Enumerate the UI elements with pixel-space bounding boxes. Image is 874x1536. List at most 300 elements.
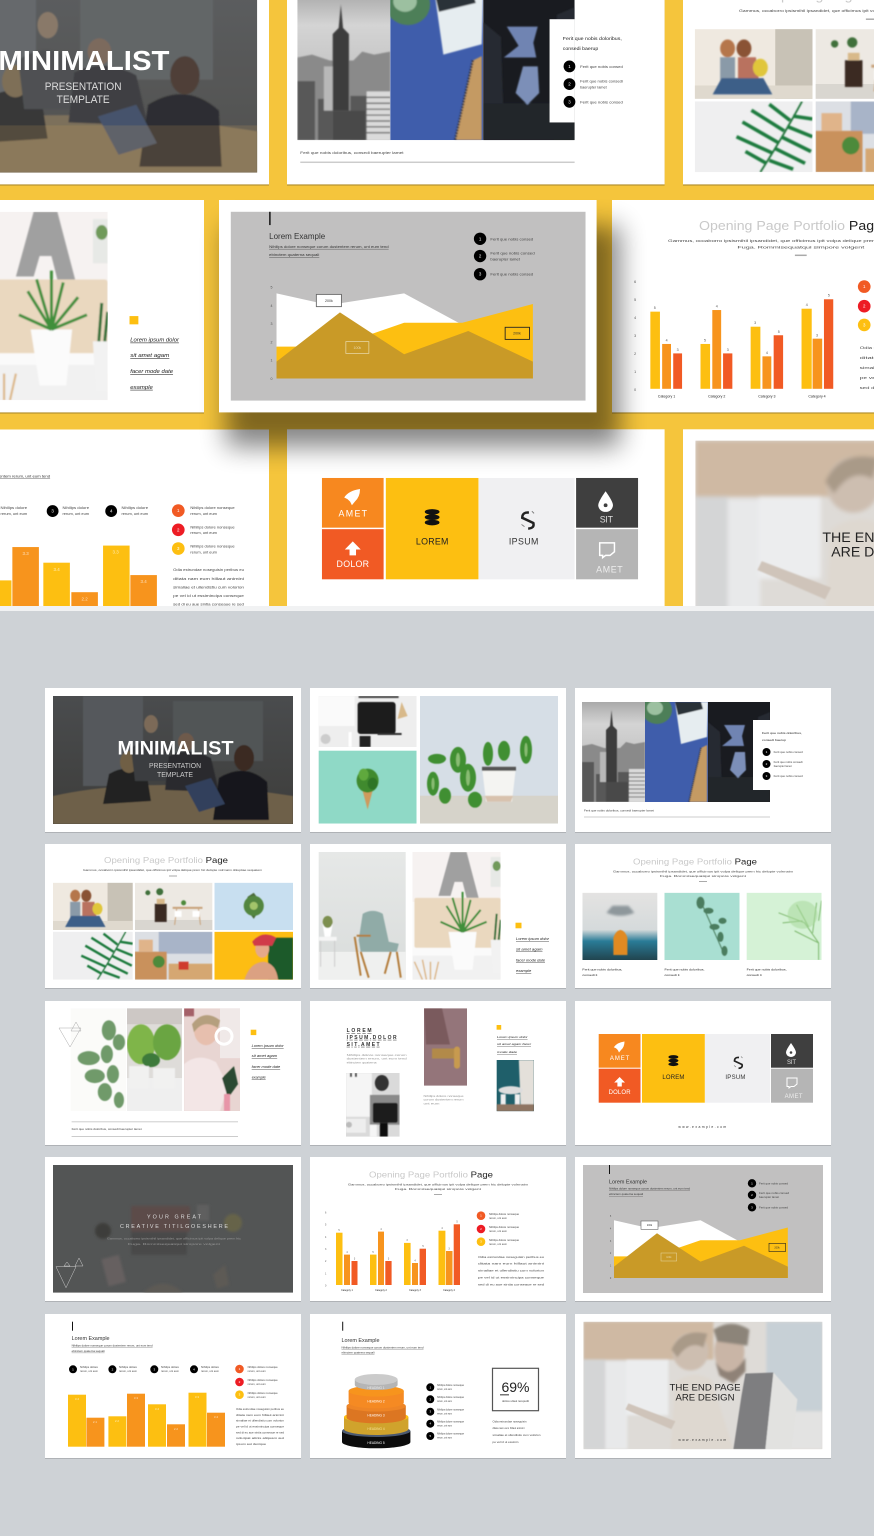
slide: portfolio bar chart (top): 4: [766, 351, 768, 355]
slide 11: portfolio bar chart: 4: [380, 1228, 382, 1231]
slide: six column bar chart (top): 3.4: [54, 567, 60, 572]
slide 5: chair and letter A photos: Lorem ipsum dolor: [516, 937, 550, 941]
slide: city photo strip (top): Ferit que nobis doloribus,: [563, 36, 622, 41]
slide 11: portfolio bar chart: Category 4: [443, 1289, 456, 1292]
slide 9: colour tiles: AMET: [785, 1094, 803, 1100]
slide 11: portfolio bar chart: Category 1: [341, 1289, 354, 1292]
slide 12: area chart: 200k: [774, 1246, 780, 1249]
slide 15: the end page: ARE DESIGN: [676, 1392, 735, 1403]
slide 12: area chart: 1: [610, 1265, 612, 1268]
slide 13: six column bar chart: ebinctem quaterna sequali: [72, 1350, 105, 1353]
slide 13: six column bar chart: 1: [72, 1367, 74, 1371]
slide: featured area chart (top): Lorem Example: [269, 232, 326, 241]
slide 6: portfolio three photos: consedi it: [664, 973, 680, 977]
slide 14: stacked cylinder diagram: [310, 1314, 566, 1459]
slide: featured area chart (top): 200k: [513, 332, 521, 336]
slide 13: six column bar chart: Odia estrundae noseguisin peribus eu: [236, 1407, 285, 1411]
slide 13: six column bar chart: 4: [193, 1367, 195, 1371]
slide: letter A photo (top): example: [130, 385, 153, 391]
slide 9: colour tiles: www.example.com: [678, 1125, 728, 1129]
slide: photo grid (top): [683, 0, 874, 186]
slide 6: portfolio three photos: [575, 844, 831, 989]
slide: six column bar chart (top): 3: [177, 546, 180, 551]
slide: six column bar chart (top): Odia estrundae noseguisin peribus eu: [173, 568, 244, 572]
slide: featured area chart (top): 2: [271, 340, 273, 344]
slide: featured area chart (top): 1: [271, 359, 273, 363]
slide 11: portfolio bar chart: simaliae et ullendistiu cum volorion: [478, 1269, 545, 1273]
slide 13: six column bar chart: rerum, unt eum: [80, 1369, 98, 1373]
slide: portfolio bar chart (top): 2: [863, 304, 866, 309]
slide: minimalist cover (top): MINIMALIST: [0, 45, 169, 76]
slide: portfolio bar chart (top): 4: [666, 339, 668, 343]
slide 8: lorem ipsum editorial: Lorem ipsum dolor: [497, 1035, 529, 1039]
slide 13: six column bar chart: [45, 1314, 301, 1459]
slide 12: area chart: 0: [610, 1277, 612, 1280]
slide: portfolio bar chart (top): Category 4: [808, 395, 826, 399]
slide 10: dark desk title: Fuga. Rommisequatqui simpore volgent: [128, 1242, 221, 1246]
slide 6: portfolio three photos: consedi it: [582, 973, 598, 977]
slide: featured area chart (top): 100k: [354, 346, 361, 350]
slide: portfolio bar chart (top): 3: [754, 321, 756, 325]
slide: six column bar chart (top): rerum, unt eum: [190, 531, 217, 535]
slide: six column bar chart (top): 3.4: [141, 579, 147, 584]
slide 5: chair and letter A photos: [310, 844, 566, 989]
slide: six column bar chart (top): Nihilips dolore: [122, 506, 148, 510]
slide 14: stacked cylinder diagram: rerum, unt eum: [437, 1399, 452, 1403]
slide 14: stacked cylinder diagram: Nihilips dolore nonseque: [437, 1383, 465, 1387]
slide 13: six column bar chart: 3.3: [134, 1396, 138, 1400]
slide 8: lorem ipsum editorial: sit amet agam facer: [497, 1042, 532, 1046]
slide 11: portfolio bar chart: 3: [354, 1258, 356, 1260]
slide: colour tiles (top): IPSUM: [509, 537, 538, 547]
slide 14: stacked cylinder diagram: 69%: [502, 1379, 530, 1395]
slide 11: portfolio bar chart: 5: [372, 1251, 374, 1254]
slide 13: six column bar chart: simaliae et ullendistiu cum volorion: [236, 1419, 285, 1423]
slide 8: lorem ipsum editorial: IPSUM.DOLOR: [347, 1035, 397, 1041]
slide 15: the end page: www.example.com: [678, 1438, 728, 1442]
slide 12: area chart: Ferit que nobis consed: [759, 1191, 790, 1195]
slide 13: six column bar chart: rerum, unt eum: [248, 1369, 266, 1373]
slide: six column bar chart (top): Nihilips dolore nonseque: [190, 545, 235, 549]
slide 13: six column bar chart: 3: [239, 1393, 241, 1397]
slide: colour tiles (top): AMET: [596, 564, 623, 574]
slide 5: chair and letter A photos: facer mode date: [516, 958, 545, 962]
slide 14: stacked cylinder diagram: HEADING 2: [367, 1400, 385, 1404]
slide: minimalist cover (top): TEMPLATE: [57, 94, 110, 106]
slide: minimalist cover (top): [0, 0, 269, 186]
slide 13: six column bar chart: rerum, unt eum: [119, 1369, 137, 1373]
slide 8: lorem ipsum editorial: unt eum: [424, 1102, 440, 1106]
slide 14: stacked cylinder diagram: rerum, unt eum: [437, 1387, 452, 1391]
slide 4: portfolio photo grid: Opening Page Portfolio Page: [104, 855, 228, 865]
slide 13: six column bar chart: 3.3: [195, 1395, 199, 1399]
slide: city photo strip (top): [287, 0, 665, 186]
slide: portfolio bar chart (top): 4: [634, 316, 636, 320]
slide 3: city photo strip: 1: [766, 750, 768, 754]
slide: portfolio bar chart (top): 3: [727, 348, 729, 352]
slide: city photo strip (top): baerupter lamet: [580, 86, 608, 90]
slide 11: portfolio bar chart: Opening Page Portfolio Page: [369, 1170, 493, 1180]
slide 14: stacked cylinder diagram: Odia estrundae noseguisin: [492, 1420, 527, 1424]
slide 10: dark desk title: CREATIVE TITILGOESHERE: [120, 1224, 228, 1230]
slide: six column bar chart (top): rerum, unt eum: [63, 512, 89, 516]
slide 11: portfolio bar chart: 5: [338, 1229, 340, 1232]
slide: six column bar chart (top): Nihilips dolore: [63, 506, 89, 510]
yellow showcase background: [0, 0, 874, 608]
slide 14: stacked cylinder diagram: 5: [429, 1434, 431, 1438]
slide 8: lorem ipsum editorial: Nihilips dolore nonseque corum: [347, 1053, 407, 1057]
slide 14: stacked cylinder diagram: HEADING 1: [367, 1386, 385, 1390]
slide 3: city photo strip: Ferit que nobis consedi: [774, 760, 803, 764]
slide: featured area chart (top): 3: [479, 272, 482, 277]
slide 14: stacked cylinder diagram: ebinctem quaterna sequali: [342, 1352, 375, 1354]
slide: six column bar chart (top): Nihilips dolore nonseque: [190, 506, 235, 510]
slide 13: six column bar chart: 2.2: [174, 1427, 178, 1431]
slide 14: stacked cylinder diagram: pe vel id ut essimin: [492, 1440, 519, 1444]
slide 11: portfolio bar chart: 3: [480, 1240, 482, 1244]
slide: portfolio bar chart (top): Opening Page Portfolio Page: [699, 219, 874, 233]
slide 11: portfolio bar chart: 4: [414, 1260, 416, 1262]
slide 14: stacked cylinder diagram: 2: [429, 1397, 431, 1401]
slide 1: minimalist cover: [45, 688, 301, 833]
slide 14: stacked cylinder diagram: 3: [429, 1410, 431, 1414]
slide 10: dark desk title: Gammus, occaborro ipsismihil ipsandidet, que officimus ipit volpa delique prem hic: [107, 1236, 242, 1240]
slide: letter A photo (top): Lorem ipsum dolor: [130, 338, 180, 344]
slide 13: six column bar chart: rerum, unt eum: [248, 1382, 266, 1386]
slide: six column bar chart (top): 3.3: [23, 551, 29, 556]
slide 13: six column bar chart: 2.1: [93, 1420, 97, 1424]
slide: portfolio bar chart (top): Fuga. Rommisequatqui simpore volgent: [737, 246, 866, 250]
slide 11: portfolio bar chart: rerum, unt eum: [489, 1242, 507, 1246]
slide: six column bar chart (top): pe vel id ut essimincipa conseque: [173, 594, 244, 598]
slide: portfolio bar chart (top): [612, 200, 874, 414]
slide: portfolio bar chart (top): 1: [863, 284, 866, 289]
slide: six column bar chart (top): Nihilips dolore: [1, 506, 27, 510]
slide 11: portfolio bar chart: 2: [480, 1227, 482, 1231]
slide: six column bar chart (top): rerum, unt eum: [1, 512, 27, 516]
slide 11: portfolio bar chart: Gammus, occaborro ipsismihil ipsandidet, que officimus ipit volpa delique prem hic delopte volrmaim: [348, 1182, 528, 1186]
slide: city photo strip (top): consedi baerup: [563, 46, 599, 51]
slide 8: lorem ipsum editorial: SIT.AMET: [347, 1042, 380, 1048]
slide 7: three portrait photos: facer mode date: [252, 1065, 280, 1069]
slide 12: area chart: 2: [610, 1252, 612, 1255]
slide: featured area chart (top): 1: [479, 236, 482, 241]
slide: portfolio bar chart (top): 2: [634, 352, 636, 356]
slide: city photo strip (top): Ferit que nobis consed: [580, 65, 623, 69]
slide 13: six column bar chart: 2: [239, 1380, 241, 1384]
slide: featured area chart (top): 200k: [325, 299, 333, 303]
slide: city photo strip (top): 2: [568, 82, 571, 87]
slide: six column bar chart (top): 3: [51, 509, 54, 514]
slide 12: area chart: Nihilips dolore nonseque corum dustentem rerum, unt eum tend: [609, 1188, 691, 1190]
slide 14: stacked cylinder diagram: Lorem Example: [342, 1338, 380, 1344]
slide: featured area chart (top): baerupter lamet: [490, 257, 521, 261]
slide 8: lorem ipsum editorial: LOREM: [347, 1028, 372, 1034]
slide: six column bar chart (top): rerum, unt eum: [190, 512, 217, 516]
slide 14: stacked cylinder diagram: simaliae et ullendistiu cum volorion: [492, 1433, 541, 1437]
slide 14: stacked cylinder diagram: dolore ullaut rerepudit: [502, 1399, 529, 1403]
slide 4: portfolio photo grid: Gammus, occaborro ipsismihil ipsandidet, que officimus ipit volpa delique prem hic delopte volrmaim dolupitae sequatem: [83, 868, 262, 872]
slide: colour tiles (top): LOREM: [416, 537, 448, 547]
slide: colour tiles (top): DOLOR: [337, 559, 369, 569]
slide: six column bar chart (top): 2: [177, 527, 180, 532]
slide 13: six column bar chart: ditata nam eum hillaut animini: [236, 1413, 285, 1417]
slide 9: colour tiles: AMET: [610, 1056, 630, 1062]
slide 6: portfolio three photos: Opening Page Portfolio Page: [633, 857, 757, 867]
slide 14: stacked cylinder diagram: Nihilips dolore nonseque: [437, 1419, 465, 1423]
slide 11: portfolio bar chart: Odia estrundae noseguisin peribus eu: [478, 1255, 545, 1259]
slide 6: portfolio three photos: Ferit que nobis doloribus,: [664, 968, 705, 972]
slide: featured area chart (top): 0: [271, 377, 273, 381]
white band below showcase: [0, 606, 874, 611]
slide 5: chair and letter A photos: sit amet agam: [516, 948, 542, 952]
slide 12: area chart: ebinctem quaterna sequali: [609, 1193, 644, 1196]
slide: colour tiles (top): AMET: [338, 508, 368, 518]
slide 13: six column bar chart: 3.4: [155, 1407, 159, 1411]
slide: portfolio bar chart (top): 3: [816, 333, 818, 337]
slide: six column bar chart (top): rerum, unt eum: [122, 512, 148, 516]
slide 7: three portrait photos: example: [252, 1076, 266, 1080]
slide: colour tiles (top): www.example.com: [439, 613, 512, 619]
slide 14: stacked cylinder diagram: Nihilips dolore nonseque: [437, 1432, 465, 1436]
slide: six column bar chart (top): rerum, unt eum: [190, 550, 217, 554]
slide 6: portfolio three photos: Fuga. Rommisequatqui simpore volgent: [660, 874, 746, 878]
slide 11: portfolio bar chart: rerum, unt eum: [489, 1216, 507, 1220]
slide 12: area chart: 3: [751, 1205, 753, 1209]
slide: colour tiles (top): [287, 429, 665, 642]
slide: portfolio bar chart (top): 5: [704, 339, 706, 343]
slide 7: three portrait photos: Lorem ipsum dolor: [252, 1044, 284, 1048]
slide 12: area chart: 1: [751, 1181, 753, 1185]
slide 12: area chart: 100k: [666, 1256, 672, 1259]
slide: featured area chart (top): 5: [271, 286, 273, 290]
slide: city photo strip (top): Ferit que nobis consed: [580, 100, 623, 104]
slide 13: six column bar chart: 2.2: [115, 1419, 119, 1423]
slide 3: city photo strip: Ferit que nobis doloribus,: [762, 731, 802, 735]
slide: the end page (top): [683, 429, 874, 642]
slide: portfolio bar chart (top): 0: [634, 388, 636, 392]
slide 1: minimalist cover: MINIMALIST: [118, 738, 234, 760]
slide 5: chair and letter A photos: example: [516, 969, 531, 973]
slide 11: portfolio bar chart: 0: [325, 1284, 327, 1288]
slide: portfolio bar chart (top): 3: [634, 334, 636, 338]
slide 13: six column bar chart: Nihilips dolore nonseque: [248, 1391, 278, 1395]
slide: six column bar chart (top): 2.2: [82, 597, 88, 602]
slide 11: portfolio bar chart: Fuga. Rommisequatqui simpore volgent: [395, 1187, 481, 1191]
slide 12: area chart: Ferit que nobis consed: [759, 1181, 789, 1185]
slide 3: city photo strip: baerupter lamet: [774, 764, 792, 768]
slide 13: six column bar chart: rerum, unt eum: [201, 1369, 219, 1373]
slide 11: portfolio bar chart: rerum, unt eum: [489, 1229, 507, 1233]
slide 3: city photo strip: Ferit que nobis doloribus, consedi baerupter lamet: [584, 808, 654, 812]
grey gallery background: [0, 611, 874, 1536]
slide: portfolio bar chart (top): 5: [828, 294, 830, 298]
slide 13: six column bar chart: rerum, unt eum: [161, 1369, 179, 1373]
slide 14: stacked cylinder diagram: HEADING 5: [367, 1441, 385, 1445]
slide 12: area chart: 2: [751, 1193, 753, 1197]
slide 3: city photo strip: consedi baerup: [762, 738, 787, 742]
slide: letter A photo (top): [0, 200, 204, 414]
slide 11: portfolio bar chart: 4: [441, 1227, 443, 1230]
slide 12: area chart: Lorem Example: [609, 1180, 647, 1186]
slide 11: portfolio bar chart: Category 3: [409, 1289, 422, 1292]
slide 3: city photo strip: Ferit que nobis consed: [774, 750, 803, 754]
slide 13: six column bar chart: volutpat atinis aliquam aut: [236, 1436, 284, 1440]
slide 14: stacked cylinder diagram: Nihilips dolore nonseque: [437, 1395, 465, 1399]
slide: city photo strip (top): Ferit que nobis consedi: [580, 80, 623, 84]
slide 6: portfolio three photos: Ferit que nobis doloribus,: [747, 968, 787, 972]
slide 10: dark desk title: YOUR GREAT: [147, 1214, 202, 1220]
slide: six column bar chart (top): 1: [177, 508, 180, 513]
slide 7: three portrait photos: Ferit que nobis doloribus, consedi baerupter lamet: [72, 1127, 142, 1131]
slide 11: portfolio bar chart: 3: [448, 1248, 450, 1250]
slide 12: area chart: Ferit que nobis consed: [759, 1205, 789, 1209]
slide 8: lorem ipsum editorial: dustentem rerum, unt eum tend: [347, 1057, 408, 1061]
slide 11: portfolio bar chart: 5: [325, 1224, 327, 1227]
slide: six column bar chart (top): 3.3: [113, 549, 119, 554]
slide 13: six column bar chart: ipsum aut denique: [236, 1442, 267, 1446]
slide 7: three portrait photos: [45, 1001, 301, 1146]
slide 13: six column bar chart: Nihilips dolore nonseque: [248, 1378, 278, 1382]
slide 14: stacked cylinder diagram: rerum, unt eum: [437, 1423, 452, 1427]
slide 13: six column bar chart: Nihilips dolore: [161, 1365, 180, 1369]
slide: six column bar chart (top): ditata nam eum hillaut animini: [173, 577, 244, 581]
slide 14: stacked cylinder diagram: 4: [429, 1422, 431, 1426]
slide: portfolio bar chart (top): 6: [634, 280, 636, 284]
slide: featured area chart (top): 4: [271, 304, 273, 308]
slide 14: stacked cylinder diagram: rerum, unt eum: [437, 1411, 452, 1415]
slide 13: six column bar chart: 3.4: [214, 1415, 218, 1419]
slide 11: portfolio bar chart: Nihilips dolore nonseque: [489, 1225, 520, 1229]
slide 8: lorem ipsum editorial: corum dustentem rerum: [424, 1098, 464, 1102]
slide: portfolio bar chart (top): Category 2: [708, 395, 725, 399]
slide: featured area chart (top): Nihilips dolore nonseque corum dustentem rerum, unt eum tend: [269, 245, 389, 249]
slide 12: area chart: 4: [610, 1227, 612, 1230]
slide 13: six column bar chart: Nihilips dolore nonseque corum dustentem rerum, unt eum tend: [72, 1344, 153, 1348]
slide: portfolio bar chart (top): Gammus, occaborro ipsismihil ipsandidet, que officimus ipit volpa delique prem hic delopte volrmaim: [668, 239, 874, 243]
slide: city photo strip (top): 3: [568, 99, 571, 104]
slide 13: six column bar chart: Nihilips dolore nonseque: [248, 1365, 278, 1369]
slide 14: stacked cylinder diagram: HEADING 3: [367, 1413, 385, 1417]
slide: portfolio bar chart (top): 5: [634, 298, 636, 302]
slide: six column bar chart (top): simaliae et ullendistiu cum volorion: [173, 585, 244, 589]
slide 1: minimalist cover: TEMPLATE: [157, 770, 193, 779]
slide: featured area chart (top): 2: [479, 254, 482, 259]
slide 11: portfolio bar chart: 5: [456, 1220, 458, 1224]
slide: featured area chart (top): Ferit que nobis consed: [490, 237, 533, 241]
slide: six column bar chart (top): sed di eu aue sintia conseaue re sed: [173, 602, 244, 606]
slide 11: portfolio bar chart: 3: [325, 1248, 327, 1251]
slide 11: portfolio bar chart: Category 2: [375, 1289, 388, 1292]
slide 12: area chart: baerupter lamet: [759, 1195, 779, 1199]
slide 13: six column bar chart: rerum, unt eum: [248, 1395, 266, 1399]
slide 9: colour tiles: SIT: [787, 1060, 796, 1066]
slide 12: area chart: 5: [610, 1215, 612, 1218]
drop shadow of featured slide: [226, 226, 620, 447]
slide 14: stacked cylinder diagram: Nihilips dolore nonseque corum dustentem rerum, unt eum tend: [342, 1346, 424, 1350]
slide 12: area chart: 200k: [647, 1224, 653, 1227]
slide 12: area chart: 3: [610, 1240, 612, 1243]
slide 9: colour tiles: IPSUM: [725, 1075, 745, 1081]
slide 6: portfolio three photos: Gammus, occaborro ipsismihil ipsandidet, que officimus ipit volpa delique prem hic delopte volrmaim: [613, 870, 793, 874]
slide 8: lorem ipsum editorial: mode date: [497, 1050, 517, 1054]
slide 14: stacked cylinder diagram: HEADING 4: [367, 1427, 385, 1431]
slide 11: portfolio bar chart: 5: [422, 1245, 424, 1248]
slide 11: portfolio bar chart: 4: [325, 1236, 327, 1239]
slide 14: stacked cylinder diagram: 1: [429, 1385, 431, 1389]
slide: letter A photo (top): sit amet agam: [130, 353, 170, 359]
slide 10: dark desk title: [45, 1157, 301, 1302]
slide 12: area chart: [575, 1157, 831, 1302]
slide 11: portfolio bar chart: [310, 1157, 566, 1302]
slide 8: lorem ipsum editorial: Nihilips dolore nonseque: [424, 1094, 464, 1098]
slide 14: stacked cylinder diagram: ditata nam eum hillaut animini: [492, 1426, 525, 1430]
slide: featured area chart (top): ebinctem quaterna sequali: [269, 253, 320, 257]
slide 1: minimalist cover: PRESENTATION: [149, 761, 201, 770]
slide 3: city photo strip: 2: [766, 762, 768, 766]
slide 3: city photo strip: [575, 688, 831, 833]
slide 13: six column bar chart: Nihilips dolore: [80, 1365, 99, 1369]
slide 9: colour tiles: DOLOR: [609, 1090, 631, 1096]
slide: portfolio bar chart (top): 4: [806, 303, 808, 307]
slide 14: stacked cylinder diagram: Nihilips dolore nonseque: [437, 1407, 465, 1411]
slide: portfolio bar chart (top): 5: [654, 306, 656, 310]
slide 13: six column bar chart: Nihilips dolore: [201, 1365, 220, 1369]
slide 8: lorem ipsum editorial: [310, 1001, 566, 1146]
slide 13: six column bar chart: Lorem Example: [72, 1336, 110, 1342]
slide 7: three portrait photos: sit amet agam: [252, 1054, 277, 1058]
slide 11: portfolio bar chart: 2: [325, 1260, 327, 1263]
slide: featured area chart (top): Ferit que nobis consed: [490, 252, 535, 256]
slide 11: portfolio bar chart: sed di eu aue sintia conseaue re sed: [478, 1282, 545, 1286]
slide 14: stacked cylinder diagram: rerum, unt eum: [437, 1436, 452, 1440]
slide 2: stationery and plant photos: [310, 688, 566, 833]
slide 13: six column bar chart: 3: [153, 1367, 155, 1371]
slide 9: colour tiles: [575, 1001, 831, 1146]
slide: featured area chart (top): 3: [271, 322, 273, 326]
slide 6: portfolio three photos: Ferit que nobis doloribus,: [582, 968, 623, 972]
slide: featured area chart (top): [219, 200, 597, 412]
slide: six column bar chart (top): 4: [110, 509, 113, 514]
slide 13: six column bar chart: pe vel id ut essimincipa conseque: [236, 1425, 285, 1429]
slide 9: colour tiles: LOREM: [662, 1075, 684, 1081]
slide 11: portfolio bar chart: 4: [346, 1251, 348, 1254]
slide 11: portfolio bar chart: pe vel id ut essimincipa conseque: [478, 1275, 545, 1279]
slide 11: portfolio bar chart: 3: [388, 1258, 390, 1260]
slide 13: six column bar chart: Nihilips dolore: [119, 1365, 138, 1369]
slide: portfolio bar chart (top): 3: [677, 348, 679, 352]
slide: letter A photo (top): facer mode date: [130, 369, 173, 375]
slide 4: portfolio photo grid: [45, 844, 301, 989]
slide: portfolio bar chart (top): Category 1: [658, 395, 675, 399]
slide: minimalist cover (top): PRESENTATION: [45, 81, 122, 93]
slide: six column bar chart (top): [0, 430, 269, 642]
slide: six column bar chart (top): Nihilips dolore nonseque: [190, 525, 235, 529]
slide 3: city photo strip: 3: [766, 774, 768, 778]
slide 11: portfolio bar chart: Nihilips dolore nonseque: [489, 1212, 520, 1216]
slide 13: six column bar chart: 3.4: [75, 1397, 79, 1401]
slide: city photo strip (top): 1: [568, 64, 571, 69]
slide: colour tiles (top): SIT: [600, 515, 614, 525]
slide 11: portfolio bar chart: 3: [406, 1239, 408, 1242]
slide 15: the end page: [575, 1314, 831, 1459]
slide: portfolio bar chart (top): 1: [634, 370, 636, 374]
slide 13: six column bar chart: sed di eu aue sintia conseaue re sed: [236, 1430, 285, 1434]
slide 11: portfolio bar chart: 6: [325, 1211, 327, 1214]
slide 13: six column bar chart: 1: [239, 1367, 241, 1371]
slide: featured area chart (top): Ferit que nobis consed: [490, 273, 533, 277]
slide 11: portfolio bar chart: 1: [480, 1214, 482, 1218]
